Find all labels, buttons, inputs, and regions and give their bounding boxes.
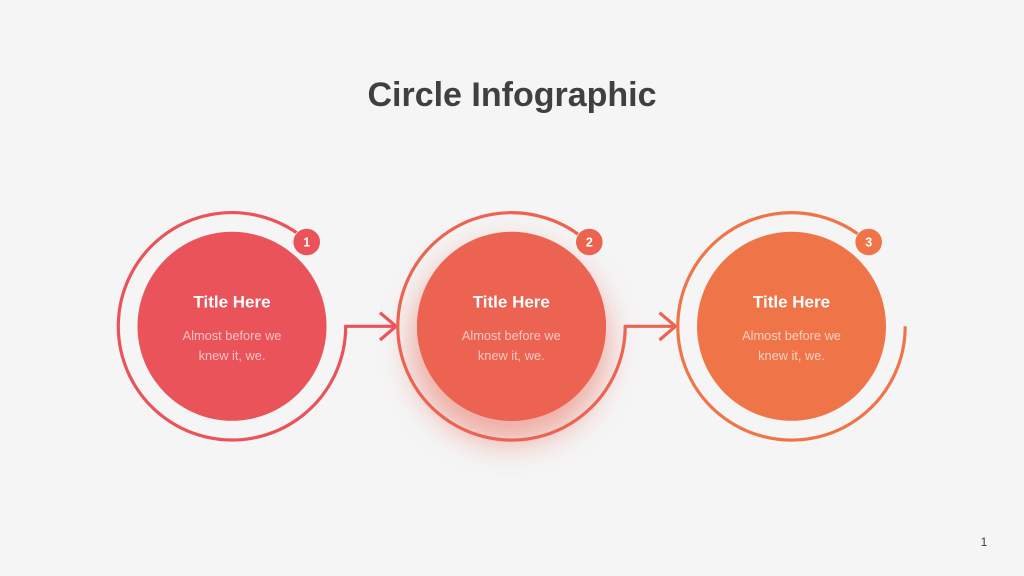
step 3 badge: 3	[865, 236, 872, 250]
circle 2 drop shadow	[417, 232, 606, 421]
step 1 description: knew it, we.	[199, 348, 265, 363]
step 3 circle	[697, 232, 886, 421]
step 1 circle	[138, 232, 326, 421]
step 1 badge	[293, 228, 321, 256]
step 3 description: Almost before we	[742, 328, 841, 343]
step 1 heading: Title Here	[193, 292, 271, 312]
step 2 badge: 2	[586, 236, 593, 250]
step 2 description: knew it, we.	[478, 348, 545, 363]
step 2 description: Almost before we	[462, 328, 561, 343]
step 1 badge: 1	[303, 236, 310, 250]
step 2 ring with arrow	[398, 213, 676, 440]
step 2 badge	[575, 228, 603, 256]
step 3 description: knew it, we.	[758, 348, 825, 363]
step 2 heading: Title Here	[473, 292, 550, 312]
page number: 1	[981, 535, 988, 549]
step 3	[678, 213, 905, 440]
step 1 description: Almost before we	[183, 328, 281, 343]
title: Circle Infographic	[367, 76, 657, 114]
step 3 ring	[678, 213, 905, 440]
step 2 circle	[417, 232, 606, 421]
step 3 badge	[855, 228, 883, 256]
step 3 heading: Title Here	[753, 292, 830, 312]
step 1	[118, 213, 396, 440]
step 1 ring with arrow	[118, 213, 396, 440]
step 2	[398, 213, 676, 440]
